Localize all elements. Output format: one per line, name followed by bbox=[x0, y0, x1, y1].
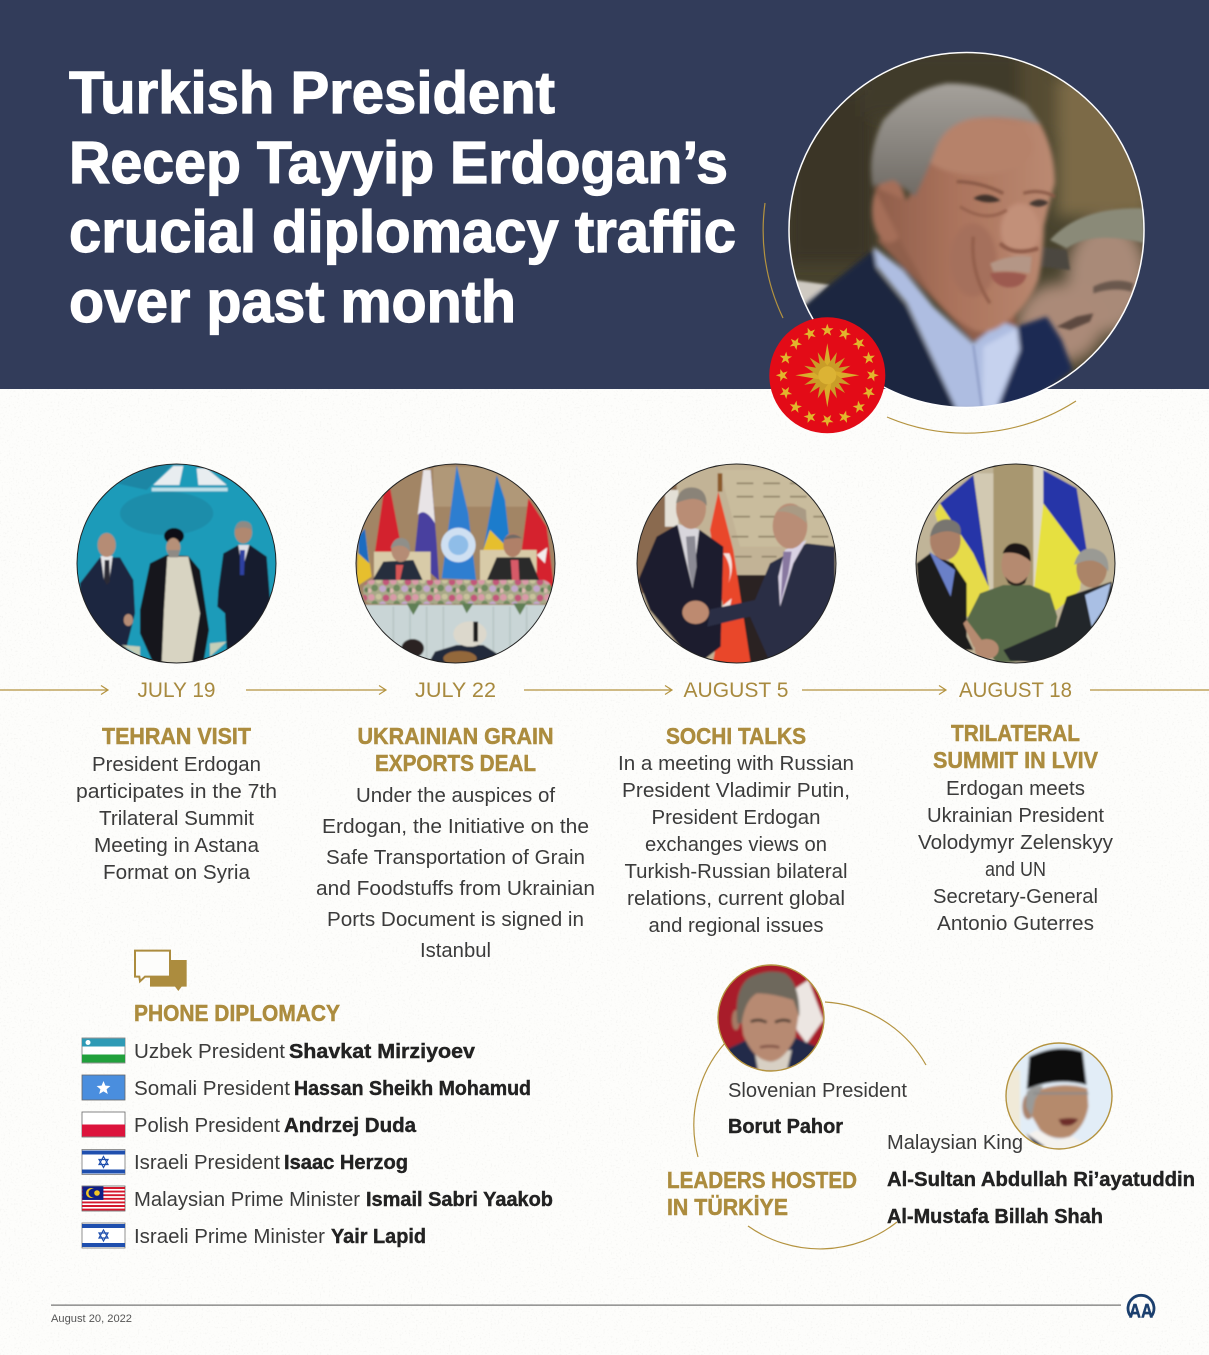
label: Malaysian King: Malaysian King bbox=[887, 1132, 1023, 1154]
text block: Sochi talks bbox=[618, 723, 854, 937]
flowers and tablecloth bbox=[366, 604, 546, 660]
mouth bbox=[990, 272, 1027, 287]
hands bbox=[682, 601, 709, 624]
audience bbox=[430, 644, 498, 662]
label: Malaysian King: Al-Mustafa Billah Shah bbox=[887, 1206, 1103, 1228]
row: Somali President: Somali President bbox=[134, 1078, 290, 1100]
text block: Trilateral summit in Lviv bbox=[918, 720, 1113, 935]
jacket left bbox=[804, 249, 958, 406]
date: July 22: JULY 22 bbox=[415, 679, 496, 702]
middle man bbox=[140, 555, 209, 663]
chairs bbox=[374, 552, 431, 582]
header band bbox=[0, 0, 1209, 389]
figure bbox=[787, 83, 1073, 410]
text block: Ukrainian grain exports deal: and Foodstuffs from Ukrainian bbox=[316, 878, 595, 900]
heading: leaders hosted bbox=[667, 1167, 857, 1220]
text block: Ukrainian grain exports deal: Safe Transportation of Grain bbox=[326, 847, 585, 869]
left man bbox=[917, 553, 973, 650]
text block: Sochi talks: In a meeting with Russian bbox=[618, 753, 854, 775]
text block: Ukrainian grain exports deal: Istanbul bbox=[420, 940, 491, 962]
date: August 5: AUGUST 5 bbox=[684, 679, 788, 702]
row: Uzbek President: Shavkat Mirziyoev bbox=[289, 1041, 476, 1063]
jacket right bbox=[993, 317, 1073, 410]
text block: Tehran visit: TEHRAN VISIT bbox=[102, 723, 251, 749]
emblem: Presidential seal bbox=[769, 317, 885, 433]
row: Polish President: Polish President bbox=[134, 1115, 280, 1137]
photo: Borut Pahor bbox=[717, 963, 827, 1073]
photo: Tehran summit bbox=[73, 460, 280, 667]
timeline bbox=[0, 679, 1209, 702]
icon: speech bubbles bbox=[135, 951, 187, 991]
heading: leaders hosted: LEADERS HOSTED bbox=[667, 1167, 857, 1193]
text block: Trilateral summit in Lviv: Erdogan meets bbox=[946, 778, 1085, 800]
text block: Sochi talks: President Erdogan bbox=[652, 807, 820, 829]
shirt collar detail bbox=[973, 345, 982, 407]
photo: Malaysian King bbox=[1003, 1040, 1117, 1153]
eyes bbox=[973, 195, 1001, 202]
row: Israeli President: Isaac Herzog bbox=[284, 1152, 408, 1174]
title: Recep Tayyip Erdogan’s bbox=[69, 130, 728, 196]
text block: Tehran visit: Format on Syria bbox=[103, 862, 251, 884]
text block: Trilateral summit in Lviv: Antonio Guterres bbox=[937, 913, 1094, 935]
text block: Tehran visit: President Erdogan bbox=[92, 754, 261, 776]
logo: Anadolu Agency bbox=[1128, 1295, 1154, 1322]
row: Malaysian Prime Minister bbox=[134, 1189, 553, 1211]
row: Uzbek President: Uzbek President bbox=[134, 1041, 285, 1063]
flag: Uzbekistan bbox=[82, 1038, 125, 1063]
text block: Sochi talks: exchanges views on bbox=[645, 834, 827, 856]
flag bbox=[710, 492, 751, 663]
signers bbox=[372, 560, 423, 582]
title: over past month bbox=[69, 269, 516, 335]
footer bbox=[51, 1295, 1154, 1325]
text block: Trilateral summit in Lviv: SUMMIT IN LVIV bbox=[933, 747, 1099, 773]
text block: Sochi talks: SOCHI TALKS bbox=[666, 723, 806, 749]
row: Somali President: Hassan Sheikh Mohamud bbox=[294, 1078, 531, 1100]
right man bbox=[707, 543, 835, 660]
text block: Sochi talks: President Vladimir Putin, bbox=[622, 780, 850, 802]
heading: leaders hosted: IN TÜRKİYE bbox=[667, 1194, 788, 1220]
label: Slovenian President bbox=[728, 1080, 907, 1138]
row: Somali President bbox=[134, 1078, 531, 1100]
row: Polish President bbox=[134, 1115, 417, 1137]
flags bbox=[375, 487, 400, 557]
date stamp: August 20, 2022 bbox=[51, 1313, 132, 1325]
text block: Tehran visit: participates in the 7th bbox=[76, 781, 277, 803]
right man bbox=[217, 545, 271, 650]
right man bbox=[1003, 582, 1115, 663]
heading: phone diplomacy: PHONE DIPLOMACY bbox=[134, 1000, 340, 1026]
flag: Malaysia bbox=[82, 1186, 125, 1211]
text block: Ukrainian grain exports deal bbox=[316, 723, 595, 962]
text block: Trilateral summit in Lviv: Secretary-General bbox=[933, 886, 1098, 908]
text block: Sochi talks: and regional issues bbox=[648, 915, 824, 937]
row: Israeli Prime Minister: Yair Lapid bbox=[331, 1226, 426, 1248]
text block: Ukrainian grain exports deal: Under the auspices of bbox=[356, 785, 555, 807]
decorative gold arcs around portrait bbox=[763, 203, 1076, 433]
date: July 19: JULY 19 bbox=[138, 679, 216, 702]
flowers bbox=[122, 645, 140, 657]
text block: Ukrainian grain exports deal: UKRAINIAN GRAIN bbox=[358, 723, 554, 749]
label: Malaysian King bbox=[887, 1132, 1195, 1228]
text block: Trilateral summit in Lviv: Volodymyr Zelenskyy bbox=[918, 832, 1113, 854]
row: Israeli Prime Minister bbox=[134, 1226, 426, 1248]
panel: phone diplomacy bbox=[82, 951, 553, 1248]
text block: Ukrainian grain exports deal: EXPORTS DEAL bbox=[375, 750, 536, 776]
centre man bbox=[967, 585, 1057, 663]
text block: Trilateral summit in Lviv: TRILATERAL bbox=[951, 720, 1080, 746]
date: August 18: AUGUST 18 bbox=[959, 679, 1072, 702]
shirt bbox=[873, 247, 1020, 410]
panel: leaders hosted in Türkiye bbox=[667, 963, 1195, 1249]
label: Malaysian King: Al-Sultan Abdullah Ri’ayatuddin bbox=[887, 1169, 1195, 1191]
flag: Poland bbox=[82, 1112, 125, 1137]
neck bbox=[877, 227, 1017, 342]
text block: Ukrainian grain exports deal: Ports Document is signed in bbox=[327, 909, 584, 931]
text block: Trilateral summit in Lviv: and UN bbox=[985, 859, 1046, 881]
photo: Sochi handshake bbox=[633, 460, 840, 667]
label: Slovenian President: Borut Pahor bbox=[728, 1116, 843, 1138]
photo: Lviv trilateral bbox=[913, 460, 1120, 667]
row: Malaysian Prime Minister: Malaysian Prime Minister bbox=[134, 1189, 360, 1211]
photo: grain exports deal signing bbox=[353, 460, 560, 668]
ear bbox=[872, 179, 907, 243]
arc connecting leaders bbox=[694, 1002, 926, 1249]
row: Polish President: Andrzej Duda bbox=[284, 1115, 417, 1137]
text block: Tehran visit: Meeting in Astana bbox=[94, 835, 260, 857]
row: Israeli President bbox=[134, 1152, 408, 1174]
blurred background bbox=[787, 50, 1150, 363]
text block: Tehran visit bbox=[76, 723, 277, 884]
Ukrainian flags bbox=[934, 496, 990, 618]
left man bbox=[80, 557, 135, 653]
row: Israeli Prime Minister: Israeli Prime Minister bbox=[134, 1226, 325, 1248]
portrait: President Erdogan bbox=[787, 50, 1150, 410]
wrinkles and brows bbox=[957, 182, 1003, 193]
flag: Somalia bbox=[82, 1075, 125, 1100]
hair bbox=[871, 83, 1041, 197]
mustache bbox=[990, 256, 1032, 273]
logo: Anadolu Agency: AA bbox=[1129, 1302, 1153, 1322]
title bbox=[69, 60, 736, 335]
row: Malaysian Prime Minister: Ismail Sabri Yaakob bbox=[366, 1189, 553, 1211]
text block: Tehran visit: Trilateral Summit bbox=[99, 808, 254, 830]
text block: Sochi talks: Turkish-Russian bilateral bbox=[624, 861, 848, 883]
left man bbox=[638, 525, 723, 660]
text block: Sochi talks: relations, current global bbox=[627, 888, 845, 910]
title: Turkish President bbox=[69, 60, 555, 126]
row: Israeli President: Israeli President bbox=[134, 1152, 280, 1174]
flag: Israel bbox=[82, 1150, 125, 1174]
face bbox=[873, 115, 1055, 332]
text block: Ukrainian grain exports deal: Erdogan, the Initiative on the bbox=[322, 816, 589, 838]
flag: Israel bbox=[82, 1223, 125, 1248]
title: crucial diplomacy traffic bbox=[69, 199, 736, 265]
text block: Trilateral summit in Lviv: Ukrainian President bbox=[927, 805, 1104, 827]
row: Uzbek President bbox=[134, 1041, 476, 1063]
label: Slovenian President: Slovenian President bbox=[728, 1080, 907, 1102]
